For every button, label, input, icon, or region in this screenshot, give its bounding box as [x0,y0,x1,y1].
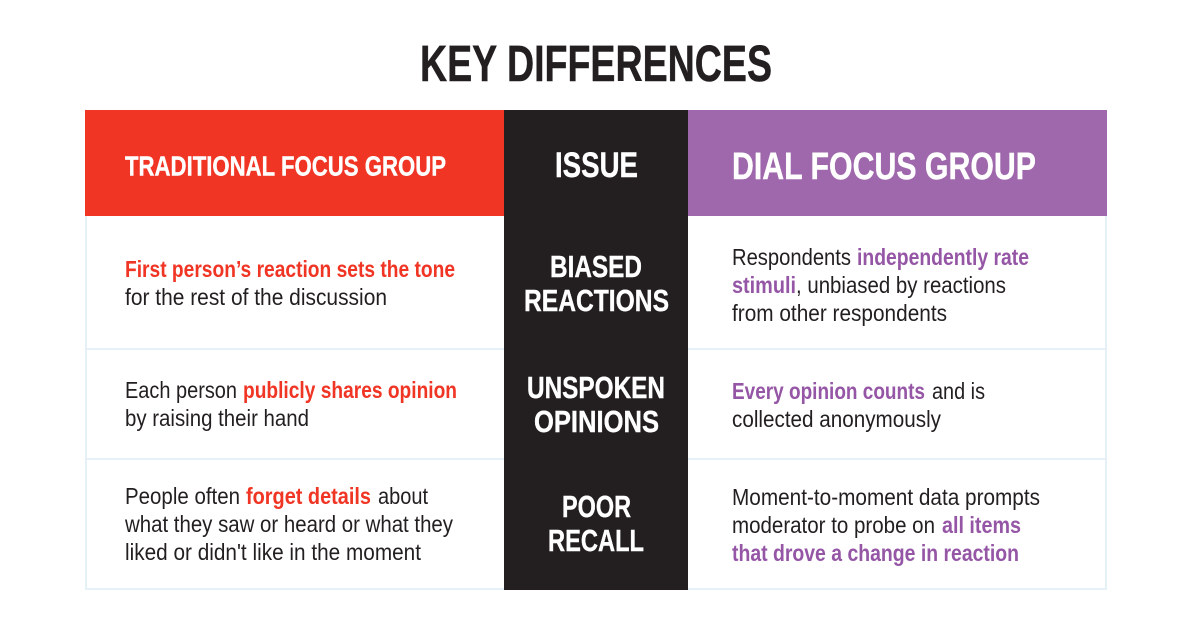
text: dial, unspoken opinions: Every opinion counts [732,378,925,404]
label: biased reactions: BIASED [550,249,642,284]
panel: issue column [504,110,688,590]
label: biased reactions [524,249,669,318]
text: traditional, poor recall: what they saw or heard or what they [124,511,453,537]
title: KEY DIFFERENCES [420,35,772,92]
text: dial, biased reactions: stimuli [732,272,796,298]
text: traditional, poor recall: about [378,483,429,509]
text: traditional, unspoken opinions [125,377,457,431]
panel: dial focus group header: DIAL FOCUS GROUP [732,146,1036,188]
panel: dial focus group header [688,110,1107,216]
text: dial, biased reactions: from other respondents [732,300,947,326]
text: dial, biased reactions: Respondents [732,244,851,270]
label: poor recall: RECALL [548,523,644,558]
text: traditional, unspoken opinions: Each person [125,377,237,403]
label: poor recall: POOR [562,489,631,524]
text: dial, biased reactions: independently rate [857,244,1029,270]
text: traditional, biased reactions: First person’s reaction sets the tone [125,256,455,282]
label: poor recall [548,489,644,558]
text: dial, poor recall: Moment-to-moment data prompts [732,484,1040,510]
text: traditional, poor recall [124,483,453,565]
panel: traditional focus group header: TRADITIONAL FOCUS GROUP [125,150,446,182]
text: dial, biased reactions: , unbiased by reactions [796,272,1006,298]
table frame [85,111,1107,589]
text: dial, unspoken opinions: collected anonymously [732,406,941,432]
text: dial, biased reactions [732,244,1029,326]
text: dial, poor recall: that drove a change in reaction [732,540,1019,566]
text: dial, unspoken opinions: and is [932,378,985,404]
text: dial, poor recall: all items [942,512,1021,538]
text: dial, poor recall [732,484,1040,566]
text: dial, unspoken opinions [732,378,985,432]
label: unspoken opinions [527,370,665,439]
text: traditional, unspoken opinions: publicly shares opinion [243,377,457,403]
label: unspoken opinions: UNSPOKEN [527,370,665,405]
text: dial, poor recall: moderator to probe on [732,512,935,538]
heading: issue: ISSUE [555,146,638,185]
text: traditional, unspoken opinions: by raising their hand [125,405,309,431]
text: traditional, poor recall: People often [125,483,240,509]
text: traditional, biased reactions: for the rest of the discussion [125,284,387,310]
panel: traditional focus group header [85,110,504,216]
text: traditional, poor recall: liked or didn't like in the moment [125,539,422,565]
text: traditional, poor recall: forget details [246,483,371,509]
text: traditional, biased reactions [125,256,455,310]
label: unspoken opinions: OPINIONS [534,404,659,439]
label: biased reactions: REACTIONS [524,283,669,318]
